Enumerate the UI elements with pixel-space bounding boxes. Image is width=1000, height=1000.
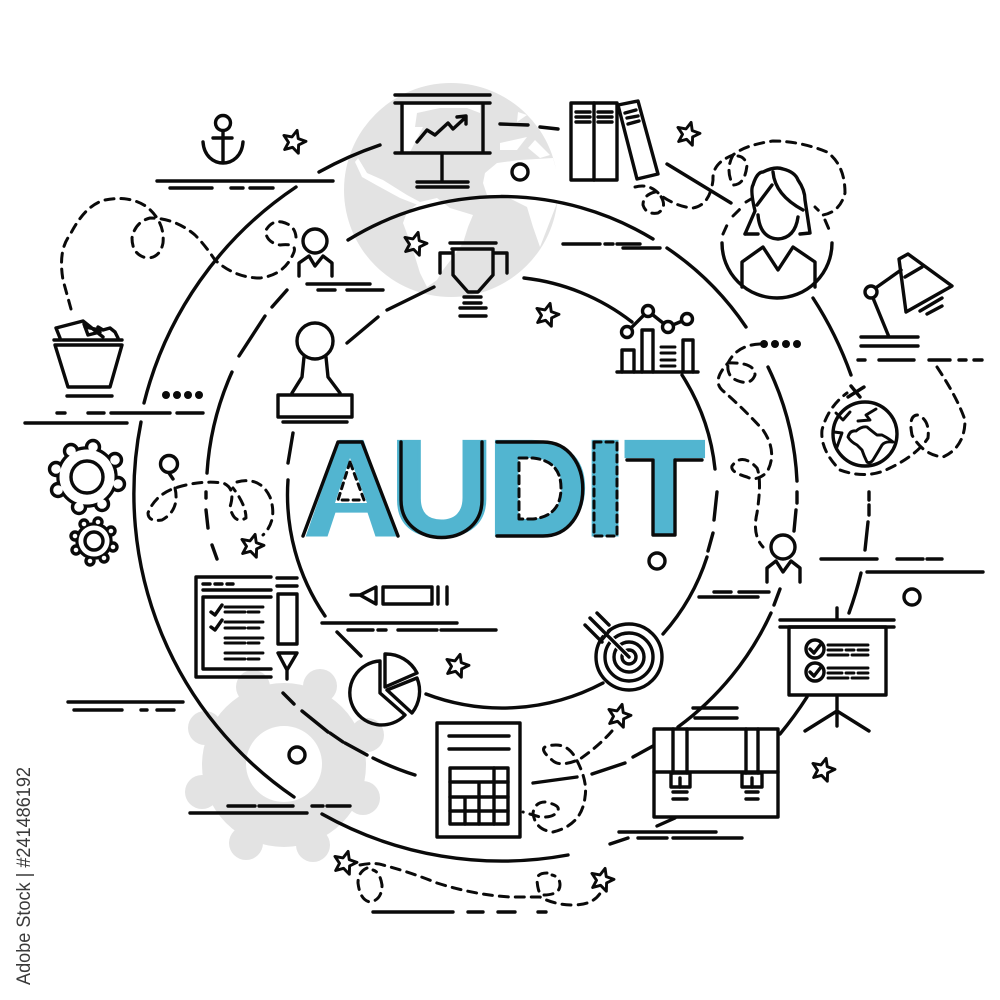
icon: checklist	[196, 577, 271, 677]
icon: pen horizontal	[351, 587, 447, 604]
icon: globe with plane	[833, 386, 897, 466]
dots left	[162, 391, 203, 399]
person left lines	[307, 284, 383, 290]
dots right	[760, 340, 801, 348]
icon: stamp	[278, 323, 352, 422]
dashed route: pin to star	[148, 481, 273, 535]
icon: calculator document	[437, 723, 520, 837]
dashed loop near dots	[728, 363, 755, 382]
icon: person left	[299, 229, 332, 276]
dashed route: bin to person	[62, 199, 296, 309]
title: AUDIT: T	[624, 412, 705, 564]
icon: chart	[617, 306, 698, 372]
title: AUDIT: U	[390, 412, 494, 564]
anchor lines	[157, 181, 333, 188]
title: AUDIT: I	[583, 412, 628, 564]
middle ring	[206, 197, 797, 783]
dashed route: target area to calculator	[523, 731, 612, 832]
icon: briefcase	[654, 729, 778, 817]
side credit text: Adobe Stock | #241486192	[14, 767, 35, 985]
lines right of trophy	[563, 244, 660, 248]
title: AUDIT	[303, 412, 705, 564]
left bottom lines	[68, 702, 183, 710]
icon: pencil vertical	[277, 578, 297, 679]
dash lines under bin	[25, 413, 203, 423]
lines above board	[821, 559, 983, 572]
pin	[160, 456, 178, 479]
icon: pie chart	[350, 654, 420, 725]
person right lines	[699, 592, 769, 597]
icon: presentation chart	[395, 95, 490, 187]
icon: books	[571, 101, 658, 180]
circles	[289, 164, 920, 763]
background globe	[344, 83, 562, 297]
dashed route: globe	[822, 367, 965, 475]
icon: trophy	[440, 243, 507, 316]
dashed loops: bottom	[358, 868, 560, 902]
title: AUDIT: A	[304, 412, 398, 564]
lines around briefcase	[619, 708, 742, 838]
icon: gears	[50, 440, 124, 565]
dashes under lamp	[858, 358, 982, 362]
gear area lines	[190, 806, 350, 813]
inner ring	[287, 278, 717, 708]
background gear	[185, 669, 384, 862]
title: AUDIT: D	[487, 412, 590, 564]
dashed route: woman	[635, 141, 845, 215]
icon: target	[585, 613, 662, 690]
icon: paper bin	[54, 321, 122, 396]
icon: woman	[722, 168, 832, 298]
dashed route: bottom	[360, 864, 602, 905]
icon: person right	[767, 535, 800, 582]
bottom dashes	[373, 910, 546, 914]
dashed route: dots to person	[718, 344, 772, 547]
icon: presentation board	[780, 608, 894, 731]
icon: anchor	[203, 116, 243, 163]
lines under pen	[322, 623, 496, 630]
dashed loops: woman and books	[643, 155, 747, 213]
icon: desk lamp	[861, 254, 952, 346]
stars	[238, 119, 837, 892]
outer ring	[134, 124, 869, 861]
